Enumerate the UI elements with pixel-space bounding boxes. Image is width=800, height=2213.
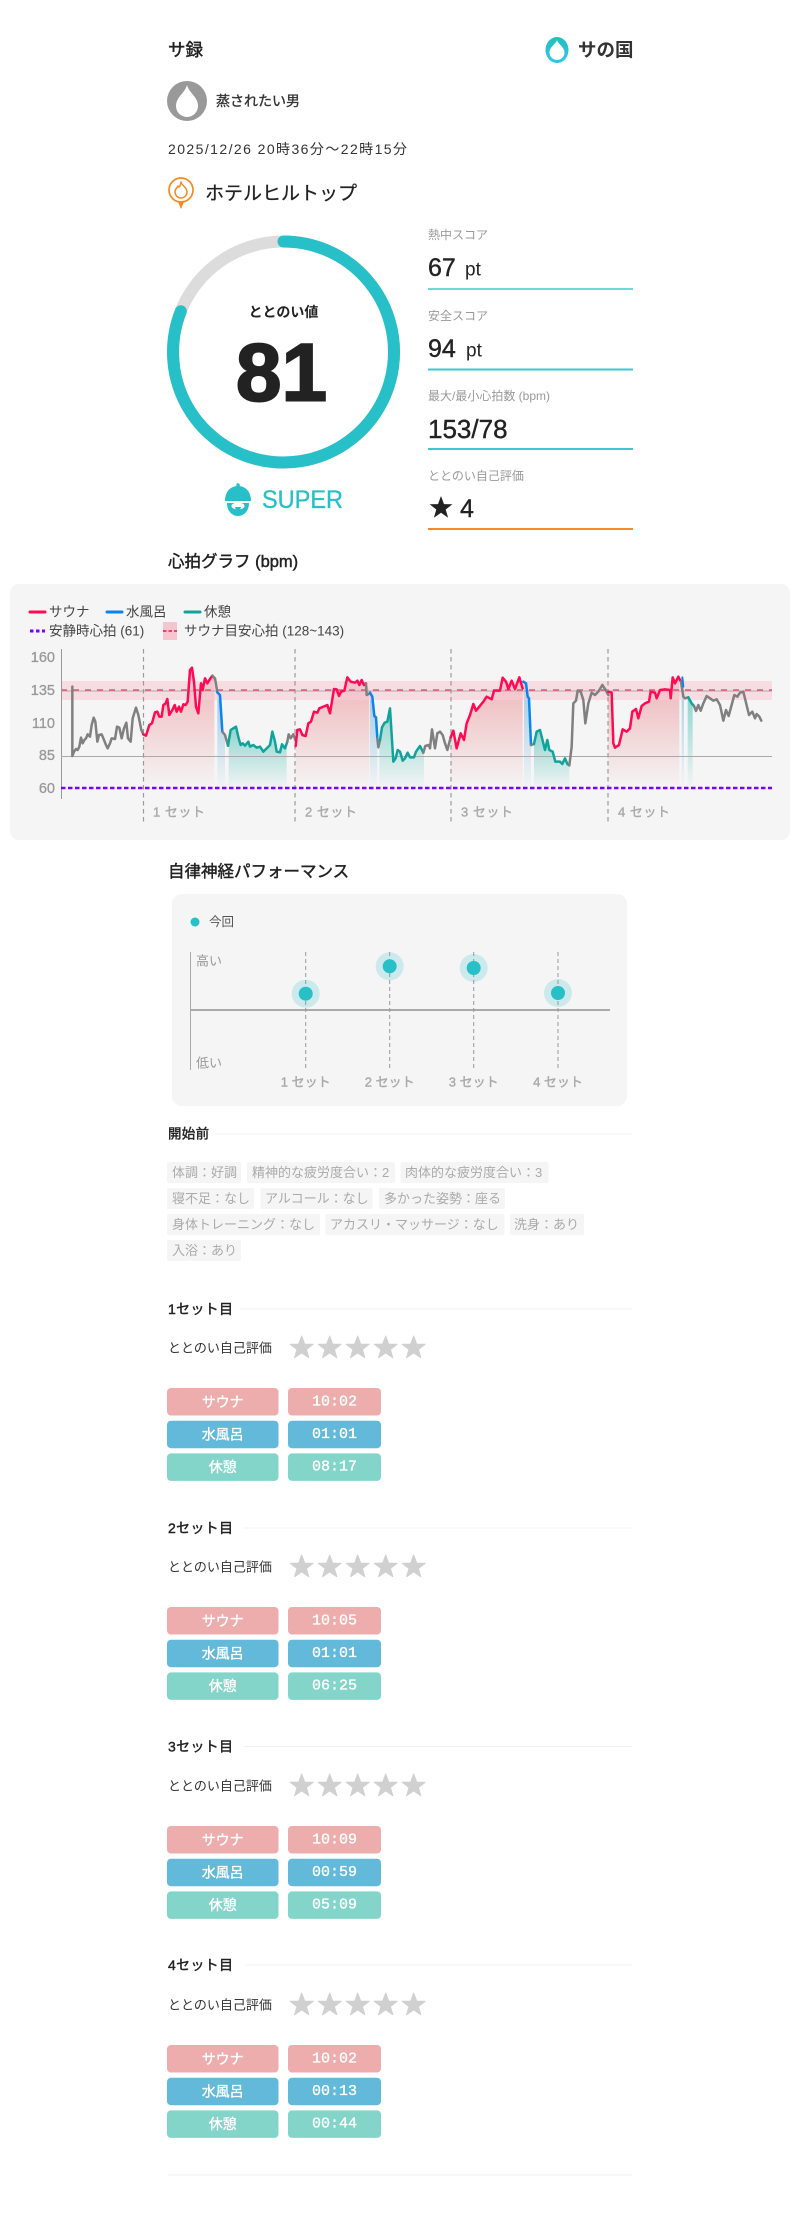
- logo: サの国: サの国: [578, 40, 634, 60]
- y axis labels: 110: [32, 716, 55, 732]
- set 3 durations: 休憩: [209, 1897, 237, 1913]
- pre-session condition tags: 洗身：あり: [514, 1217, 579, 1232]
- set 3 durations: 水風呂: [202, 1864, 244, 1880]
- set 3 durations: 00:59: [312, 1864, 357, 1881]
- axes: [190, 952, 610, 1070]
- set 1 durations: 水風呂: [202, 1426, 244, 1442]
- pre-session condition tags: アルコール：なし: [265, 1191, 369, 1206]
- set 4 durations: 00:44: [312, 2116, 357, 2132]
- score: 最大/最小心拍数: 最大/最小心拍数 (bpm): [428, 388, 550, 403]
- sauna target band: [61, 681, 772, 700]
- score: 熱中スコア: 熱中スコア: [428, 227, 488, 242]
- set 4 durations: 休憩: [209, 2116, 237, 2132]
- set 4 durations: [167, 2045, 381, 2138]
- set 3 durations: 10:09: [312, 1832, 357, 1848]
- resting heart rate line: [61, 787, 772, 789]
- user name: 蒸されたい男: [216, 93, 300, 109]
- axes: 低い: [196, 1056, 222, 1070]
- set 1 point: 1 セット: [281, 1074, 331, 1090]
- set 2 durations: 休憩: [209, 1678, 237, 1694]
- pre-session condition tags: [167, 1162, 584, 1261]
- set 4 durations: 水風呂: [202, 2084, 244, 2100]
- heading: autonomic nerve performance: 自律神経パフォーマンス: [168, 862, 349, 881]
- set 4 durations: 00:13: [312, 2083, 357, 2100]
- set 1 self rating: [168, 1336, 425, 1358]
- set 2 durations: 01:01: [312, 1645, 357, 1662]
- rank: SUPER: SUPER: [262, 486, 343, 514]
- y axis labels: 60: [39, 781, 55, 797]
- gauge: ととのい値 81: 81: [236, 328, 327, 418]
- heart rate area fills: [143, 668, 693, 790]
- set 2 durations: 水風呂: [202, 1646, 244, 1662]
- set 1 heading: 1セット目: [168, 1301, 233, 1317]
- set labels: [153, 804, 670, 820]
- y axis labels: 160: [31, 650, 55, 666]
- y axis labels: [31, 650, 55, 797]
- score: 安全スコア: 94: [428, 335, 456, 363]
- heart rate line: [72, 668, 761, 765]
- axes: 高い: [196, 954, 222, 968]
- pre-session condition tags: 寝不足：なし: [172, 1191, 250, 1206]
- set 2 point: [365, 952, 415, 1090]
- pre-session condition tags: 多かった姿勢：座る: [384, 1191, 501, 1206]
- set 3 point: [449, 952, 499, 1090]
- pre-session condition tags: 体調：好調: [172, 1165, 237, 1180]
- score: ととのい自己評価: ととのい自己評価: [428, 469, 524, 483]
- set 2 durations: 10:05: [312, 1612, 357, 1630]
- section: set 4: [167, 1957, 632, 2138]
- set 1 durations: 01:01: [312, 1426, 357, 1443]
- set 3 point: 3 セット: [449, 1074, 499, 1090]
- panel: autonomic performance chart: [172, 894, 627, 1106]
- logo: サの国: [546, 37, 634, 63]
- score: 最大/最小心拍数: [428, 388, 633, 450]
- gauge: ととのい値 81: ととのい値: [249, 304, 318, 320]
- section: set 3: [167, 1738, 632, 1919]
- score: 安全スコア: pt: [466, 340, 483, 362]
- set 4 point: 4 セット: [533, 1074, 583, 1090]
- icon: hotel pin: [169, 178, 193, 209]
- legend: 今回: [190, 914, 234, 929]
- y axis labels: 85: [39, 748, 55, 764]
- set 3 durations: [167, 1826, 381, 1919]
- score: 熱中スコア: [428, 227, 633, 290]
- chart legend: 休憩: [204, 604, 231, 620]
- panel: heart rate chart: [10, 584, 790, 840]
- chart legend: [30, 604, 344, 640]
- set 3 durations: サウナ: [202, 1832, 244, 1848]
- set 1 durations: 10:02: [312, 1394, 357, 1410]
- gauge: ととのい値 81: [173, 242, 394, 462]
- pre-session condition tags: 身体トレーニング：なし: [172, 1217, 315, 1232]
- pre-session condition tags: 肉体的な疲労度合い：3: [405, 1165, 542, 1180]
- set 2 self rating: ととのい自己評価: [168, 1560, 272, 1574]
- set 2 self rating: [168, 1555, 425, 1577]
- pre-session condition tags: 入浴：あり: [172, 1243, 237, 1258]
- section heading: 開始前: 開始前: [168, 1126, 209, 1142]
- set 3 heading: 3セット目: [168, 1738, 233, 1754]
- set labels: 3 セット: [461, 804, 513, 820]
- set 2 heading: 2セット目: [168, 1520, 233, 1536]
- set 1 durations: [167, 1388, 381, 1481]
- set 3 self rating: [168, 1774, 425, 1796]
- score: ととのい自己評価: [428, 469, 633, 530]
- pre-session condition tags: 精神的な疲労度合い：2: [252, 1165, 389, 1180]
- hotel name: ホテルヒルトップ: [205, 182, 357, 204]
- set labels: 1 セット: [153, 804, 205, 820]
- chart legend: 安静時心拍 (61): [49, 624, 144, 638]
- chart legend: サウナ目安心拍 (128~143): [184, 624, 344, 638]
- set 4 heading: 4セット目: [168, 1957, 233, 1973]
- set 1 durations: 08:17: [312, 1458, 357, 1476]
- set 1 point: [281, 952, 331, 1090]
- set 4 self rating: ととのい自己評価: [168, 1998, 272, 2012]
- set labels: 4 セット: [618, 804, 670, 820]
- score: 熱中スコア: 67: [428, 254, 456, 282]
- legend: 今回: 今回: [209, 914, 234, 929]
- set 3 self rating: ととのい自己評価: [168, 1778, 272, 1794]
- page title: サ録: [168, 40, 203, 60]
- rank: SUPER: [225, 483, 343, 516]
- set 2 durations: 06:25: [312, 1678, 357, 1694]
- set 2 durations: サウナ: [202, 1613, 244, 1629]
- set 4 self rating: [168, 1993, 425, 2015]
- score: 安全スコア: 安全スコア: [428, 309, 488, 323]
- grid, axis and set markers: [61, 649, 772, 822]
- date and time: 2025/12/26 20時36分～22時15分: [168, 141, 407, 157]
- score: 熱中スコア: pt: [465, 260, 482, 280]
- set 4 durations: 10:02: [312, 2050, 357, 2068]
- set 2 durations: [167, 1607, 381, 1700]
- chart legend: 水風呂: [126, 604, 166, 620]
- section: set 1: [167, 1301, 632, 1481]
- set labels: 2 セット: [305, 804, 357, 820]
- user avatar: [167, 81, 207, 121]
- score: ととのい自己評価: 4: [460, 495, 474, 523]
- chart legend: サウナ: [49, 604, 90, 620]
- pre-session condition tags: アカスリ・マッサージ：なし: [330, 1217, 499, 1232]
- icon: sauna hat: [225, 483, 251, 516]
- y axis labels: 135: [31, 683, 55, 699]
- score: 最大/最小心拍数: 153/78: [428, 414, 508, 444]
- set 1 self rating: ととのい自己評価: [168, 1340, 272, 1356]
- set 2 point: 2 セット: [365, 1074, 415, 1090]
- section: set 2: [167, 1520, 632, 1700]
- set 4 point: [533, 952, 583, 1090]
- score: 安全スコア: [428, 309, 633, 370]
- set 1 durations: 休憩: [209, 1459, 237, 1475]
- set 3 durations: 05:09: [312, 1896, 357, 1914]
- heading: heart rate graph: 心拍グラフ (bpm): [168, 552, 298, 571]
- set 1 durations: サウナ: [202, 1394, 244, 1410]
- set 4 durations: サウナ: [202, 2051, 244, 2067]
